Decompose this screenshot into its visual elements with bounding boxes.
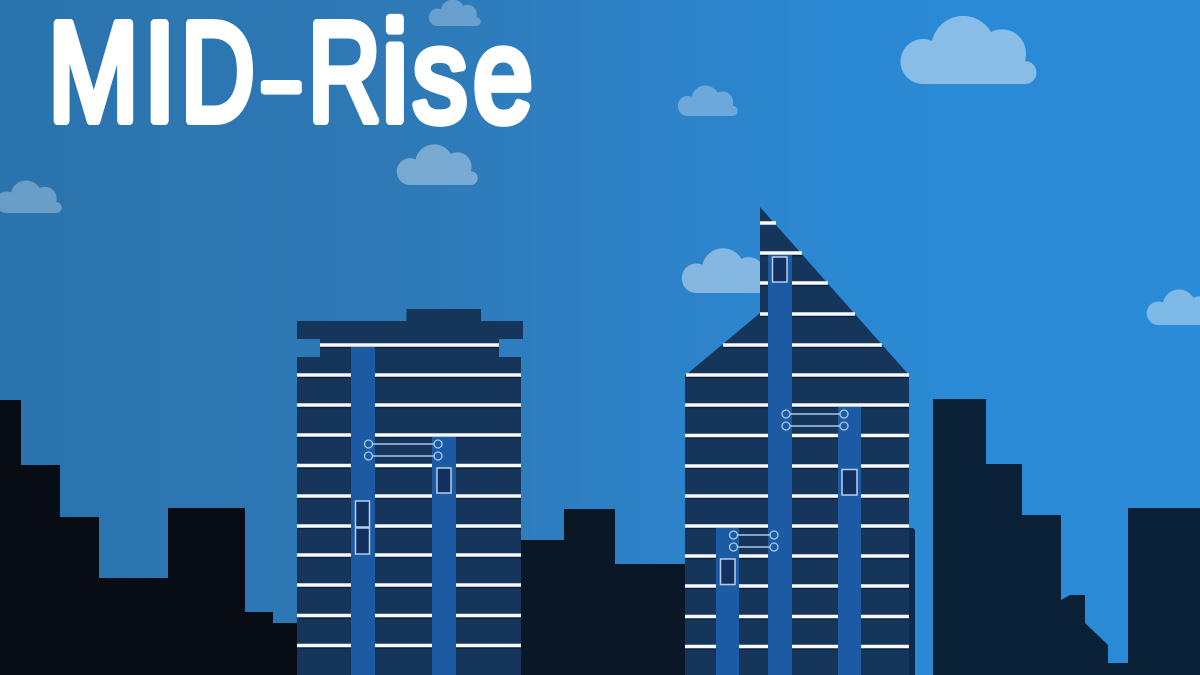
cloud: large top right bbox=[900, 16, 1036, 84]
elevator cars bbox=[720, 257, 857, 584]
floor lines bbox=[685, 223, 909, 646]
skybridge connectors upper bbox=[782, 410, 848, 430]
elevator shaft centre bbox=[768, 255, 792, 675]
skybridge connectors bbox=[364, 440, 442, 460]
elevator shaft right bbox=[838, 407, 861, 675]
cloud: top centre bbox=[429, 0, 481, 26]
title: s bbox=[413, 1, 467, 150]
skyline: left silhouette bbox=[0, 400, 300, 675]
cloud: small centre bbox=[678, 86, 738, 116]
elevator shaft right bbox=[432, 437, 456, 675]
building: right sliver bbox=[905, 528, 915, 675]
cloud: far left bbox=[0, 180, 62, 213]
floor shadows bbox=[685, 256, 909, 649]
skybridge connectors lower bbox=[730, 531, 778, 551]
cloud: below title bbox=[397, 144, 478, 185]
building body bbox=[297, 309, 523, 675]
building: pointed tower bbox=[685, 207, 909, 675]
elevator shaft left bbox=[351, 347, 375, 675]
title: - bbox=[259, 22, 303, 137]
cloud: behind tower bbox=[682, 248, 771, 293]
floor lines bbox=[297, 345, 521, 646]
tower body bbox=[685, 207, 909, 675]
skyline: middle silhouette bbox=[518, 509, 690, 675]
elevator cars bbox=[356, 468, 451, 554]
floor shadows bbox=[297, 348, 521, 648]
title: e bbox=[473, 1, 533, 150]
title bbox=[48, 0, 533, 151]
elevator shaft left bbox=[716, 528, 739, 675]
building: left mid-rise bbox=[297, 309, 523, 675]
skyline: right silhouette bbox=[933, 399, 1200, 675]
cloud: far right bbox=[1147, 289, 1200, 325]
